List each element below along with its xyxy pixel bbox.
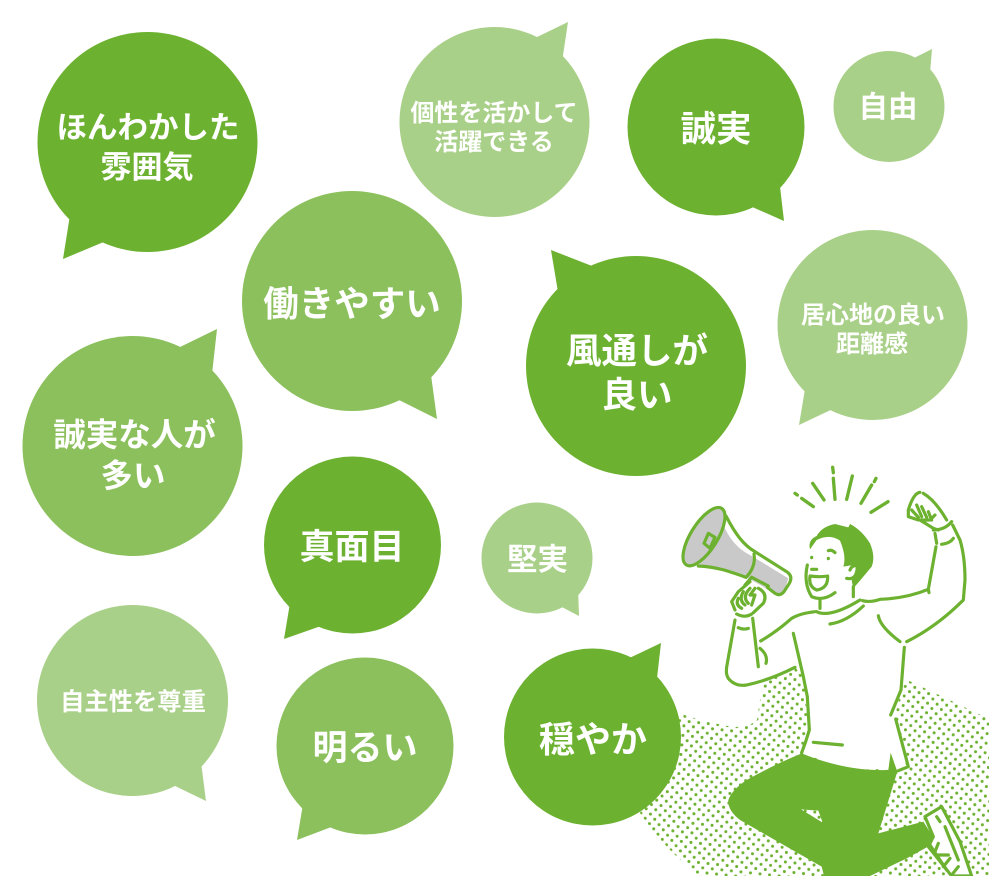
bubble: 誠実な人が多い — [22, 329, 242, 556]
bubble: 明るい — [276, 658, 454, 840]
raised arm and fist — [863, 492, 965, 642]
bubble: 自由: 自由 — [858, 91, 918, 124]
shout rays — [795, 467, 888, 512]
bubble: 働きやすい — [242, 191, 462, 419]
bubble: 誠実 (top): 誠実 — [680, 109, 752, 149]
trousers — [728, 753, 934, 876]
head — [806, 524, 873, 598]
bubble: 風通しが良い: 風通しが — [566, 331, 708, 371]
bubble: 自主性を尊重 — [37, 605, 228, 801]
bubble: 居心地の良い距離感: 居心地の良い — [801, 302, 945, 329]
bubble: 明るい: 明るい — [312, 729, 418, 768]
bubble: 穏やか: 穏やか — [539, 719, 647, 760]
bubble: 居心地の良い距離感 — [778, 230, 968, 425]
bubble: 穏やか — [504, 643, 681, 826]
bubble: 働きやすい: 働きやすい — [263, 284, 441, 324]
megaphone — [675, 501, 791, 595]
bubble: 真面目 — [264, 456, 441, 639]
halftone background blob — [640, 667, 989, 876]
bubble: ほんわかした雰囲気: ほんわかした — [56, 111, 240, 145]
bubble: 個性を活かして活躍できる: 活躍できる — [434, 129, 554, 156]
body white fill — [726, 525, 965, 770]
shoe — [925, 807, 972, 876]
torso — [793, 616, 908, 771]
bubble: 真面目: 真面目 — [299, 528, 405, 567]
bubble: ほんわかした雰囲気 — [38, 32, 258, 259]
bubble: 個性を活かして活躍できる: 個性を活かして — [410, 100, 578, 127]
bubble: 居心地の良い距離感: 距離感 — [836, 331, 908, 358]
bubble: 個性を活かして活躍できる — [400, 22, 590, 217]
bubble: ほんわかした雰囲気: 雰囲気 — [100, 150, 194, 185]
bubble: 堅実: 堅実 — [507, 543, 568, 577]
neck and collar — [817, 587, 863, 624]
illustration: man shouting into a megaphone — [675, 467, 972, 876]
bubble: 誠実な人が多い: 多い — [100, 458, 166, 494]
bubble: 風通しが良い: 良い — [601, 375, 673, 415]
bubble: 堅実 — [482, 502, 592, 616]
bubble: 誠実な人が多い: 誠実な人が — [53, 416, 216, 453]
bubble: 自由 — [834, 49, 944, 162]
bubble: 自主性を尊重: 自主性を尊重 — [60, 689, 206, 716]
left fist and arm — [726, 582, 815, 685]
bubble: 誠実 (top) — [628, 38, 804, 221]
bubble: 風通しが良い — [526, 250, 746, 476]
